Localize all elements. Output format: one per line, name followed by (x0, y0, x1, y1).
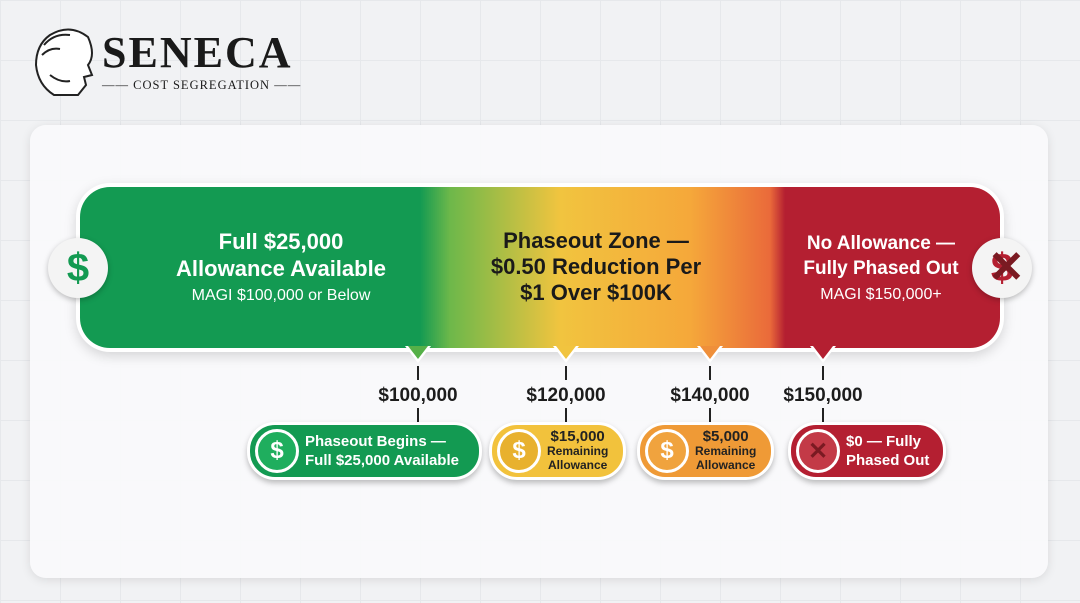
pill: 5000: $5,000 (703, 428, 749, 445)
segment: phaseout: $0.50 Reduction Per (491, 254, 701, 279)
icon: bust (35, 28, 94, 96)
segment: phaseout (491, 228, 701, 305)
pill: 0 fully phased out (788, 422, 946, 480)
segment: no allowance: MAGI $150,000+ (820, 286, 942, 303)
pill: 15000: $15,000 (551, 428, 605, 445)
pill: 15000: Remaining (547, 444, 608, 458)
logo text: SENECA (102, 28, 292, 77)
timeline markers: $150,000 (783, 385, 863, 406)
pill: 5000: Remaining (695, 444, 756, 458)
logo (35, 28, 301, 96)
icon: crossed dollar right (972, 238, 1032, 298)
pill: 0 fully phased out: ✕ (808, 438, 828, 464)
timeline markers: $120,000 (526, 385, 606, 406)
segment: no allowance (803, 233, 959, 303)
pill: phaseout begins: Phaseout Begins — (305, 433, 446, 450)
pill: 15000: Allowance (548, 458, 607, 472)
segment: full allowance (176, 229, 386, 304)
segment: no allowance: No Allowance — (807, 233, 955, 254)
main bar (76, 183, 1004, 352)
icon: crossed dollar right: ✕ (988, 243, 1025, 292)
icon: dollar left (48, 238, 108, 298)
pill: 0 fully phased out: Phased Out (846, 452, 929, 469)
logo: —— COST SEGREGATION —— (102, 78, 301, 92)
panel (30, 125, 1048, 578)
pill: 15000: $ (512, 437, 526, 464)
pointers under bar (405, 346, 836, 362)
pill: phaseout begins: Full $25,000 Available (305, 452, 459, 469)
timeline markers: $140,000 (670, 385, 750, 406)
segment: phaseout: $1 Over $100K (520, 280, 672, 305)
segment: full allowance: Full $25,000 (219, 229, 343, 254)
segment: no allowance: Fully Phased Out (803, 258, 959, 279)
icon: crossed dollar right: $ (991, 246, 1013, 290)
pill: 5000 (637, 422, 774, 480)
pill: 5000: $ (660, 437, 674, 464)
segment: phaseout: Phaseout Zone — (503, 228, 689, 253)
pill: phaseout begins: $ (270, 437, 284, 464)
pill: 0 fully phased out: $0 — Fully (846, 433, 921, 450)
timeline markers: $100,000 (378, 385, 458, 406)
segment: full allowance: MAGI $100,000 or Below (192, 287, 370, 304)
pill: 5000: Allowance (696, 458, 755, 472)
icon: dollar left: $ (67, 246, 89, 290)
pill: phaseout begins (247, 422, 482, 480)
timeline markers (378, 366, 863, 422)
segment: full allowance: Allowance Available (176, 256, 386, 281)
pill: 15000 (489, 422, 626, 480)
